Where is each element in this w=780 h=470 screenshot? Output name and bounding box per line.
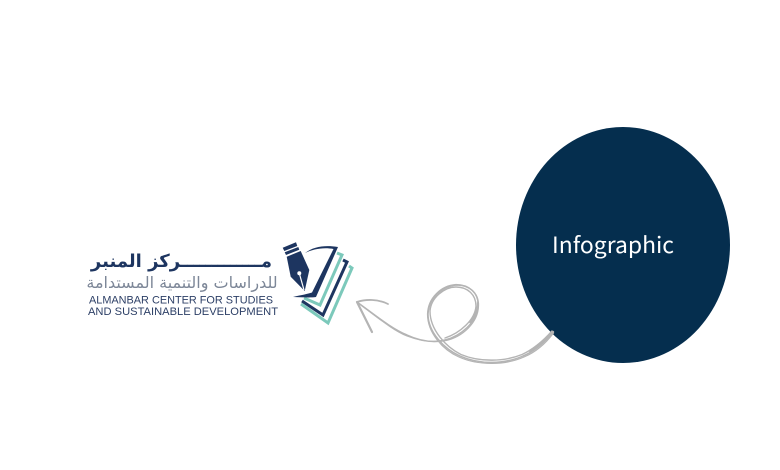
back teal page — [304, 253, 342, 305]
arrow: hand-drawn loop pointing to logo — [357, 284, 554, 363]
logo English line 2: AND SUSTAINABLE DEVELOPMENT — [88, 306, 278, 318]
navy page — [302, 260, 347, 315]
nib hole — [297, 271, 301, 275]
logo: Almanbar Center — [86, 242, 352, 323]
logo Arabic name: مـــــــــــــركز المنبر — [90, 251, 272, 272]
navy ellipse — [516, 127, 730, 363]
logo Arabic subtitle: للدراسات والتنمية المستدامة — [86, 273, 278, 293]
logo English line 1: ALMANBAR CENTER FOR STUDIES — [89, 294, 273, 306]
front teal page — [301, 266, 352, 323]
circle with title — [516, 127, 730, 363]
front navy page with swoosh — [293, 246, 338, 297]
pen nib — [287, 251, 309, 291]
pen cap bars — [283, 242, 299, 255]
logo icon: fountain pen and book pages — [283, 242, 352, 323]
nib slit — [299, 273, 304, 290]
title: Infographic — [552, 228, 674, 260]
